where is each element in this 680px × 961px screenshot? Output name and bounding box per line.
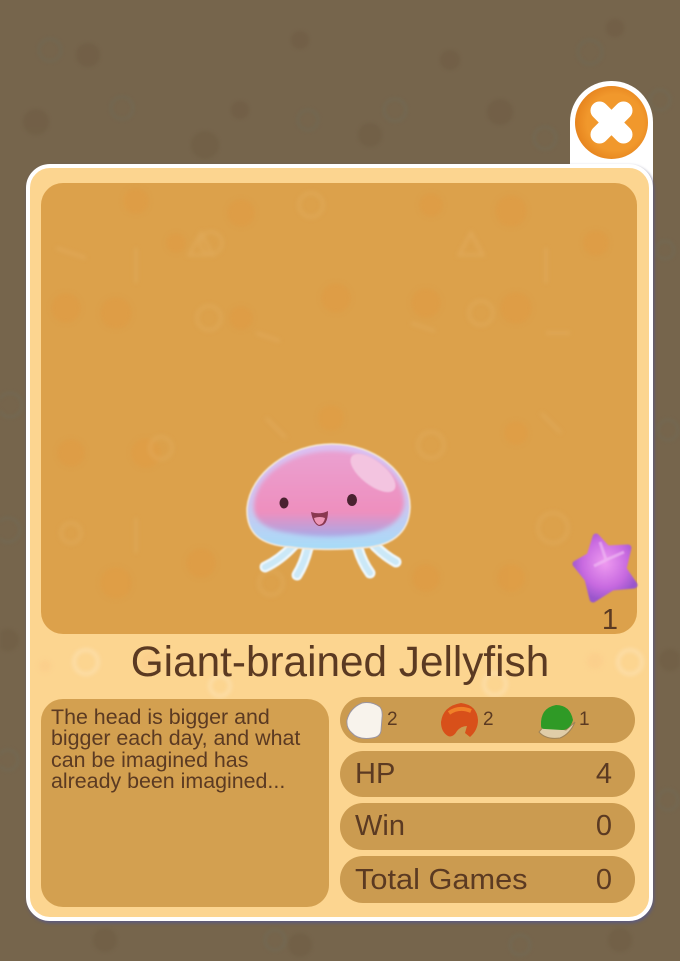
bell — [247, 444, 410, 549]
icon: jellyfish — [245, 442, 412, 582]
count: green shell: 1 — [579, 709, 590, 730]
mouth — [311, 511, 328, 526]
panel: description — [41, 699, 329, 907]
icon: purple star — [572, 532, 638, 604]
description text: bigger each day, and what — [51, 726, 300, 750]
panel: creature display — [41, 183, 637, 634]
count: red shell: 2 — [483, 709, 494, 730]
highlight — [344, 447, 402, 499]
card pale pattern — [72, 648, 644, 698]
stat: Total Games: 0 — [596, 864, 612, 896]
stat: HP: 4 — [596, 758, 612, 790]
icon: white shell — [346, 702, 383, 739]
description text: The head is bigger and — [51, 705, 270, 729]
tentacles — [265, 546, 396, 575]
card — [26, 164, 653, 921]
icon: green shell — [538, 705, 576, 739]
stat: Total Games — [340, 856, 635, 903]
count: shell: 2 — [387, 709, 398, 730]
description text: can be imagined has — [51, 748, 248, 772]
star count: 1 — [602, 604, 618, 636]
brain — [254, 451, 404, 536]
stat: Total Games: Total Games — [355, 864, 528, 896]
stat: Win: Win — [355, 810, 405, 842]
close button — [570, 81, 653, 186]
stat: Win: 0 — [596, 810, 612, 842]
panel pattern — [198, 234, 481, 255]
eyes — [280, 498, 288, 508]
icon: orange close X — [575, 86, 648, 159]
icon: red shell — [441, 703, 478, 737]
description text — [51, 705, 300, 793]
stat: Win — [340, 803, 635, 850]
panel: resources — [340, 697, 635, 743]
stat: HP — [340, 751, 635, 797]
title: Giant-brained Jellyfish — [131, 638, 549, 685]
description text: already been imagined... — [51, 769, 285, 793]
close button tab — [570, 81, 653, 191]
stat: HP: HP — [355, 758, 395, 790]
